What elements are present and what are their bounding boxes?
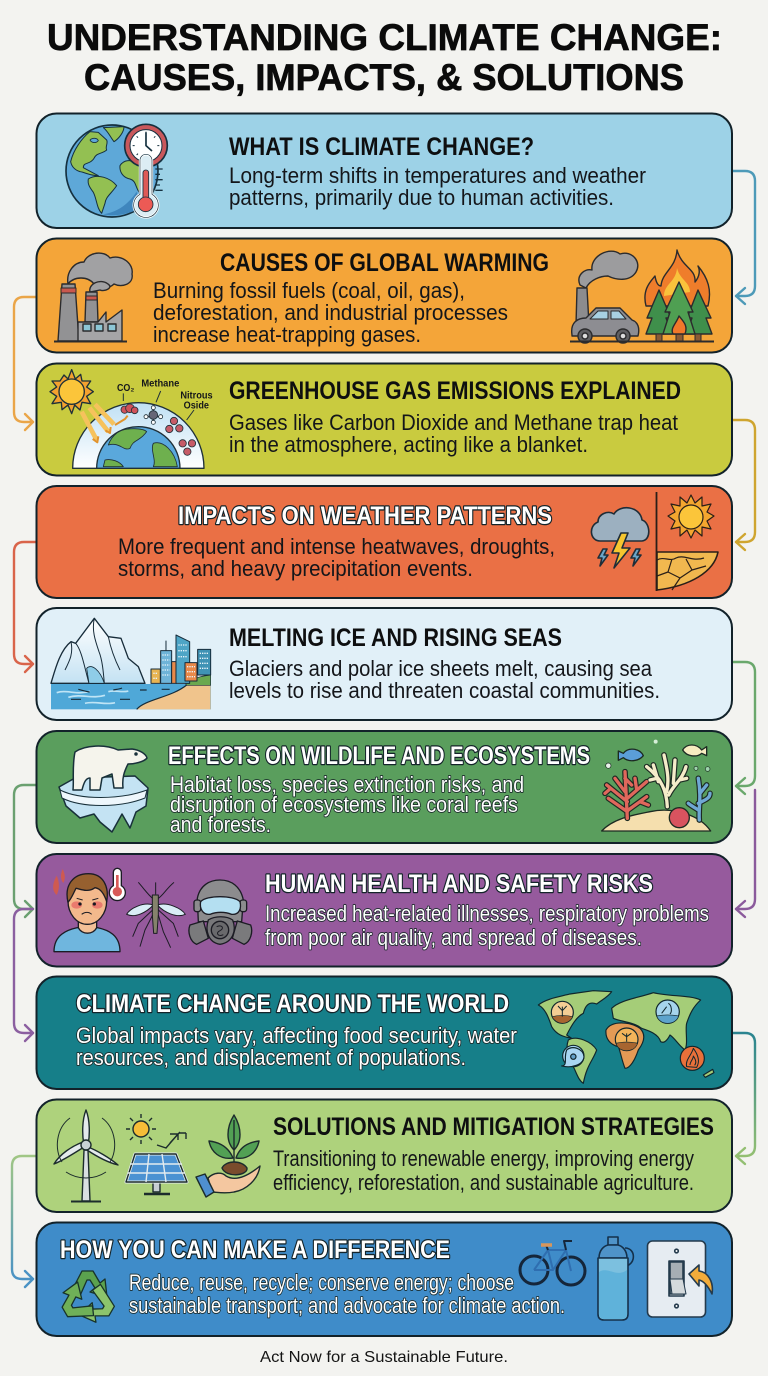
icon: globe with clock and thermometer — [66, 124, 167, 217]
body text: Gases like Carbon Dioxide and Methane trap heat — [229, 410, 678, 435]
title: CAUSES, IMPACTS, & SOLUTIONS — [84, 57, 684, 98]
panel: impacts on weather patterns — [36, 486, 732, 598]
body text: resources, and displacement of populations. — [76, 1045, 466, 1070]
body text — [229, 163, 646, 210]
panel: how you can make a difference — [36, 1222, 732, 1336]
icon: polar bear on melting ice floe — [59, 746, 148, 832]
body text: Burning fossil fuels (coal, oil, gas), — [153, 278, 465, 303]
arrow: solutions to make a difference — [12, 1156, 36, 1287]
body text: Transitioning to renewable energy, improving energy — [273, 1146, 694, 1171]
icon: light switch — [648, 1241, 712, 1317]
icon: reusable water bottle — [598, 1237, 633, 1320]
icon: car exhaust and forest fire — [570, 250, 714, 343]
icon: coral reef with fish — [602, 740, 711, 831]
heading: HOW YOU CAN MAKE A DIFFERENCE — [60, 1236, 450, 1264]
icon: hand holding seedling — [196, 1115, 260, 1197]
body text: More frequent and intense heatwaves, droughts, — [118, 534, 555, 559]
arrow: wildlife to health right side — [736, 790, 755, 917]
body text: disruption of ecosystems like coral reefs — [170, 792, 518, 817]
icon: factory with smoke — [54, 253, 132, 342]
body text — [273, 1146, 694, 1195]
body text — [76, 1023, 517, 1070]
body text: storms, and heavy precipitation events. — [118, 556, 473, 581]
body text: levels to rise and threaten coastal communities. — [229, 678, 660, 703]
body text: Global impacts vary, affecting food security, water — [76, 1023, 517, 1048]
heading: GREENHOUSE GAS EMISSIONS EXPLAINED — [229, 377, 681, 405]
body text — [129, 1270, 565, 1318]
panel: greenhouse gas emissions explained — [36, 364, 732, 476]
body text — [229, 656, 660, 703]
icon: recycling arrows — [55, 1271, 120, 1328]
arrow: what is climate change to causes — [733, 171, 755, 304]
footer tagline: Act Now for a Sustainable Future. — [260, 1349, 508, 1366]
title: UNDERSTANDING CLIMATE CHANGE: — [47, 17, 722, 58]
body text — [170, 772, 524, 837]
panel: melting ice and rising seas — [36, 608, 732, 720]
heading: IMPACTS ON WEATHER PATTERNS — [178, 502, 552, 530]
panel: climate change around the world — [36, 976, 732, 1089]
arrow: wildlife to health — [14, 785, 36, 917]
icon: storm cloud — [591, 508, 649, 568]
heading: CLIMATE CHANGE AROUND THE WORLD — [76, 990, 509, 1018]
icon: iceberg, sea and coastal city — [51, 618, 211, 709]
icon: mosquito — [127, 882, 185, 948]
body text — [229, 410, 678, 457]
body text: Habitat loss, species extinction risks, and — [170, 772, 524, 797]
arrow: causes to greenhouse gases — [14, 297, 36, 430]
arrow: around the world to solutions — [733, 1033, 755, 1164]
icon: world map with impact badges — [538, 991, 714, 1083]
diagram labels: CO₂ — [117, 383, 134, 394]
icon: gas mask — [189, 880, 252, 944]
heading: MELTING ICE AND RISING SEAS — [229, 624, 562, 652]
body text — [118, 534, 555, 581]
panel: what is climate change — [36, 114, 732, 228]
panel: effects on wildlife and ecosystems — [36, 731, 732, 843]
body text — [265, 901, 709, 950]
heading: WHAT IS CLIMATE CHANGE? — [229, 133, 534, 161]
arrow: weather to melting ice — [14, 542, 36, 672]
body text: in the atmosphere, acting like a blanket. — [229, 432, 588, 457]
title — [47, 17, 722, 98]
body text: sustainable transport; and advocate for climate action. — [129, 1293, 565, 1318]
body text — [153, 278, 508, 347]
panel: causes of global warming — [36, 238, 732, 352]
heading: CAUSES OF GLOBAL WARMING — [220, 249, 549, 277]
diagram labels: Oside — [184, 400, 209, 411]
panel: human health and safety risks — [36, 854, 732, 966]
body text: increase heat-trapping gases. — [153, 322, 421, 347]
heading: HUMAN HEALTH AND SAFETY RISKS — [265, 870, 653, 898]
icon: wind turbine — [54, 1110, 118, 1202]
arrow: melting ice to wildlife — [733, 662, 755, 794]
icon: greenhouse effect diagram — [50, 370, 213, 468]
body text: Reduce, reuse, recycle; conserve energy; choose — [129, 1270, 514, 1295]
diagram labels — [117, 378, 213, 411]
body text: and forests. — [170, 812, 271, 837]
body text: efficiency, reforestation, and sustainable agriculture. — [273, 1170, 694, 1195]
arrow: health to around the world — [14, 909, 33, 1041]
diagram labels: Methane — [141, 378, 180, 389]
icon: bicycle — [520, 1241, 585, 1285]
body text: Long-term shifts in temperatures and weather — [229, 163, 646, 188]
arrow: greenhouse gases to weather — [733, 420, 755, 550]
diagram labels: Nitrous — [180, 390, 213, 401]
icon: sun and cracked drought earth — [656, 492, 718, 591]
body text: patterns, primarily due to human activities. — [229, 185, 614, 210]
icon: overheated person with thermometer — [53, 868, 125, 952]
panel: solutions and mitigation strategies — [36, 1100, 732, 1212]
body text: deforestation, and industrial processes — [153, 300, 508, 325]
body text: Glaciers and polar ice sheets melt, causing sea — [229, 656, 653, 681]
icon: solar panel with sun — [126, 1114, 187, 1194]
heading: EFFECTS ON WILDLIFE AND ECOSYSTEMS — [168, 742, 590, 770]
body text: from poor air quality, and spread of diseases. — [265, 925, 642, 950]
